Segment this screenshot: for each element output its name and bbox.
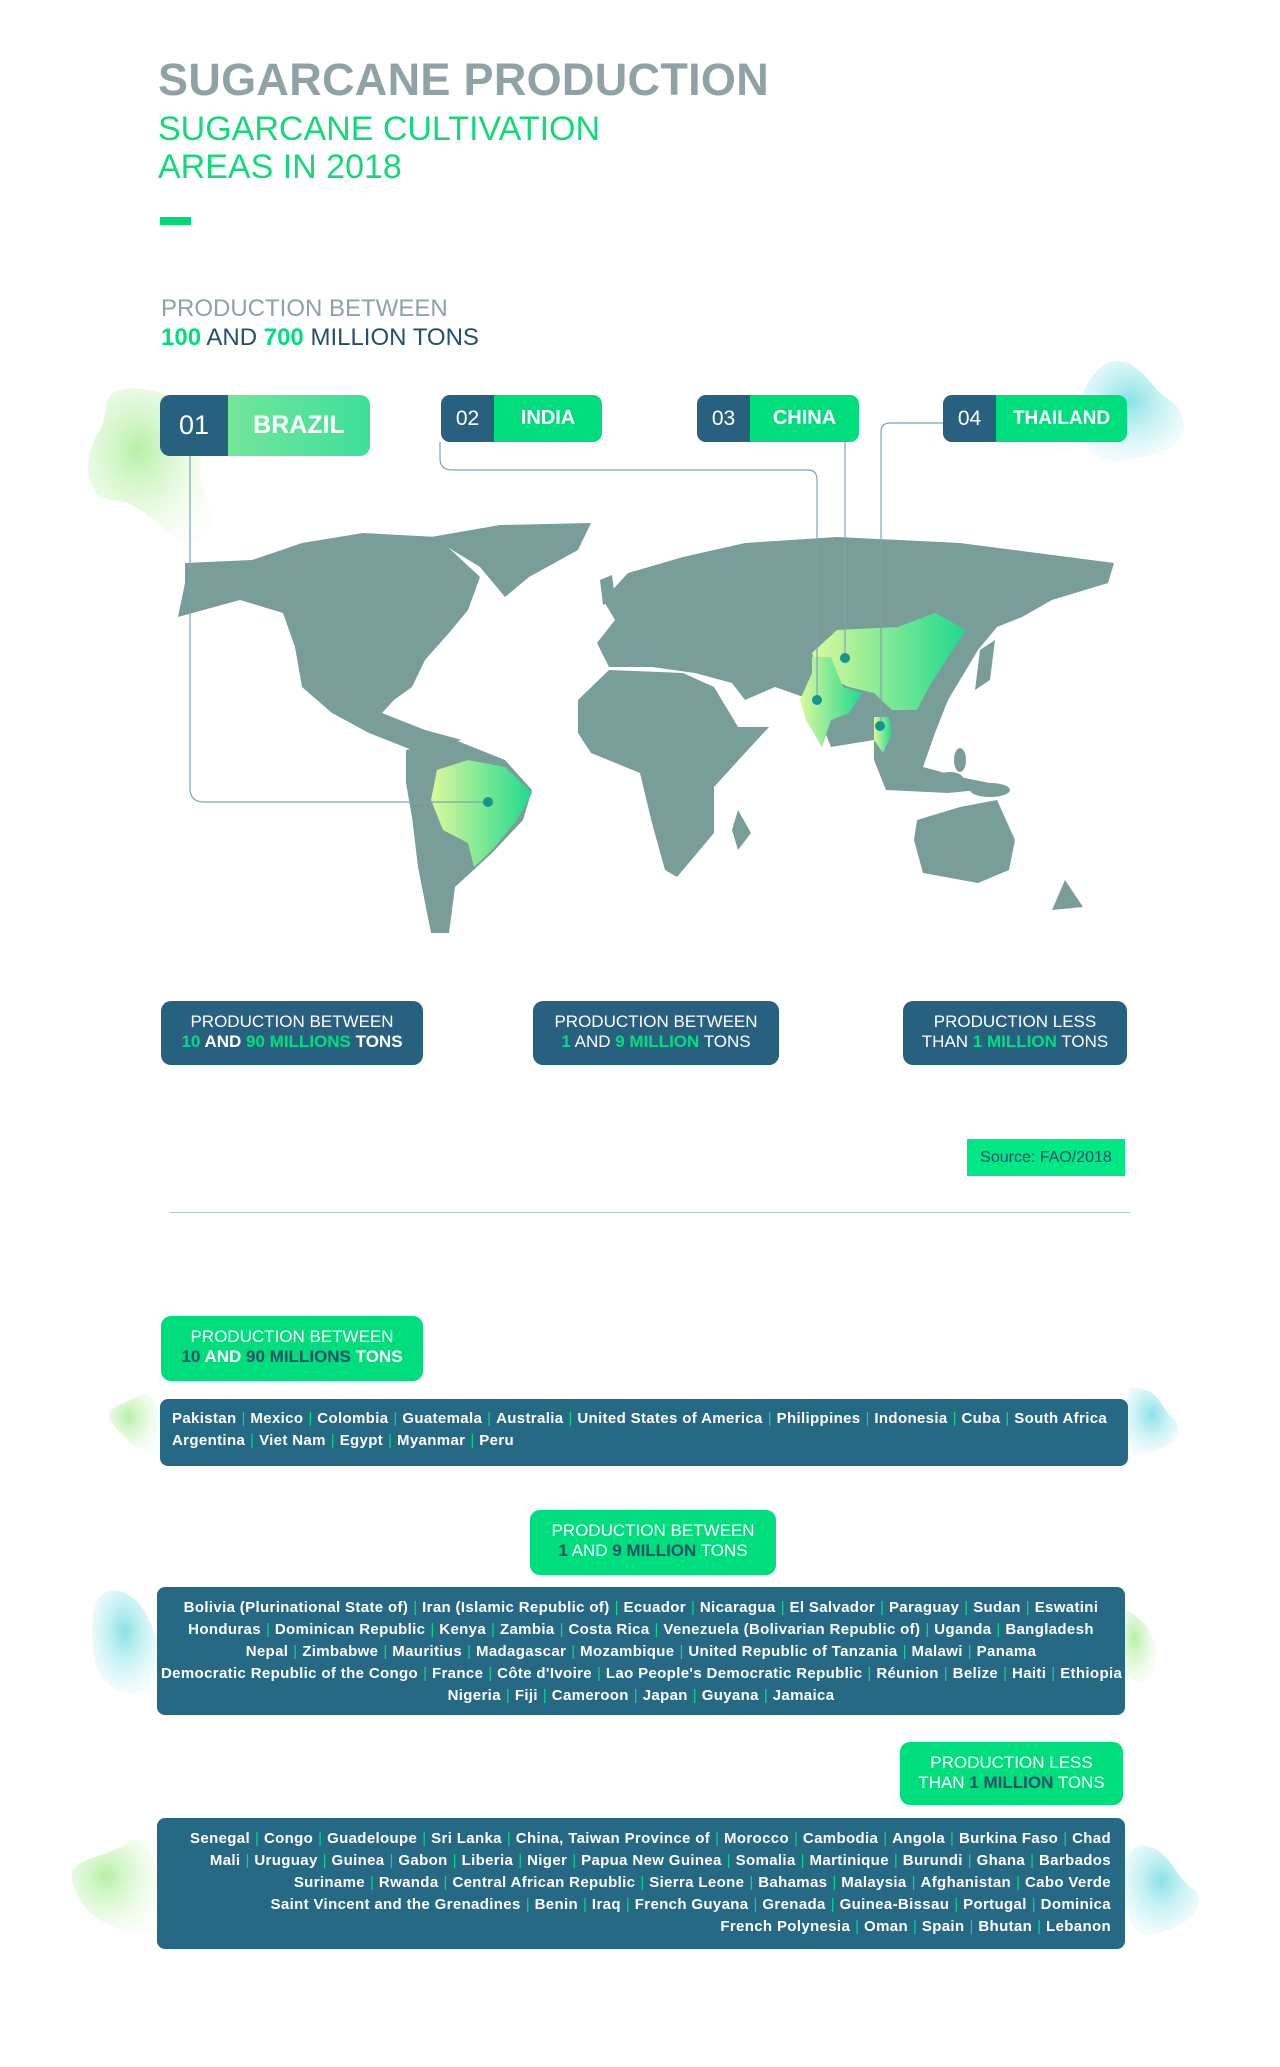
legend: 10-90 million bbox=[161, 1001, 423, 1065]
section label: 10-90 million: PRODUCTION BETWEEN bbox=[190, 1327, 394, 1346]
production heading: PRODUCTION BETWEEN bbox=[161, 295, 448, 322]
section label: less than 1 million bbox=[900, 1742, 1123, 1805]
legend: less than 1 million bbox=[903, 1001, 1127, 1065]
list panel: less than 1 million: Mali | Uruguay | Guinea | Gabon | Liberia | Niger | Papua New Guinea | Somalia | Martinique | Burundi | Ghana | Barbados bbox=[210, 1852, 1111, 1869]
section label: 1-9 million: PRODUCTION BETWEEN bbox=[551, 1521, 755, 1540]
label: 01 brazil: BRAZIL bbox=[253, 411, 345, 439]
greenland bbox=[431, 523, 591, 597]
section label: 10-90 million bbox=[161, 1316, 423, 1381]
list panel: 10-90 million: Argentina | Viet Nam | Egypt | Myanmar | Peru bbox=[172, 1432, 514, 1449]
title: SUGARCANE PRODUCTION bbox=[158, 54, 769, 105]
section label: 1-9 million: 1 AND 9 MILLION TONS bbox=[558, 1541, 748, 1560]
legend: 10-90 million: 10 AND 90 MILLIONS TONS bbox=[181, 1032, 403, 1051]
source: Source: FAO/2018 bbox=[980, 1149, 1112, 1166]
list panel: 1-9 million: Nigeria | Fiji | Cameroon | Japan | Guyana | Jamaica bbox=[448, 1687, 834, 1704]
label: 04 thailand: 04 bbox=[958, 407, 981, 430]
list panel: less than 1 million bbox=[157, 1818, 1125, 1949]
section label: 1-9 million bbox=[530, 1510, 776, 1575]
dots bbox=[483, 653, 885, 807]
list panel: less than 1 million: Senegal | Congo | Guadeloupe | Sri Lanka | China, Taiwan Province of | Morocco | Cambodia | Angola | Burkina Faso | Chad bbox=[190, 1830, 1111, 1847]
accent dash bbox=[160, 217, 191, 225]
label: 02 india bbox=[441, 395, 602, 442]
list panel: 1-9 million bbox=[157, 1587, 1125, 1715]
australia bbox=[914, 800, 1015, 883]
label: 01 brazil: 01 bbox=[179, 410, 209, 440]
south america bbox=[406, 740, 532, 933]
label: 01 brazil bbox=[160, 395, 370, 456]
subtitle bbox=[158, 110, 600, 186]
production heading bbox=[161, 295, 479, 351]
subtitle: AREAS IN 2018 bbox=[158, 148, 402, 186]
list panel: less than 1 million: Suriname | Rwanda | Central African Republic | Sierra Leone | Bahamas | Malaysia | Afghanistan | Cabo Verde bbox=[294, 1874, 1111, 1891]
legend: less than 1 million: THAN 1 MILLION TONS bbox=[922, 1032, 1108, 1051]
label: 04 thailand: THAILAND bbox=[1013, 408, 1110, 429]
label: 03 china: CHINA bbox=[773, 407, 836, 429]
production heading: 100 AND 700 MILLION TONS bbox=[161, 324, 479, 351]
eurasia bbox=[597, 537, 1114, 793]
label: 03 china: 03 bbox=[712, 407, 735, 430]
label: 02 india: INDIA bbox=[521, 407, 575, 429]
section label: less than 1 million: THAN 1 MILLION TONS bbox=[918, 1773, 1105, 1792]
north america bbox=[178, 533, 480, 750]
list panel: less than 1 million: French Polynesia | Oman | Spain | Bhutan | Lebanon bbox=[720, 1918, 1111, 1935]
uk & japan & islands bbox=[600, 575, 615, 605]
list panel: 1-9 million: Honduras | Dominican Republic | Kenya | Zambia | Costa Rica | Venezuela (Bolivarian Republic of) | Uganda | Bangladesh bbox=[188, 1621, 1094, 1638]
list panel: 1-9 million: Democratic Republic of the Congo | France | Côte d'Ivoire | Lao People's Democratic Republic | Réunion | Belize | Haiti | Ethiopia bbox=[161, 1665, 1122, 1682]
list panel: 10-90 million bbox=[160, 1399, 1128, 1466]
list panel: less than 1 million: Saint Vincent and the Grenadines | Benin | Iraq | French Guyana | Grenada | Guinea-Bissau | Portugal | Dominica bbox=[271, 1896, 1111, 1913]
legend: less than 1 million: PRODUCTION LESS bbox=[934, 1012, 1096, 1031]
list panel: 1-9 million: Nepal | Zimbabwe | Mauritius | Madagascar | Mozambique | United Republic of Tanzania | Malawi | Panama bbox=[246, 1643, 1036, 1660]
list panel: 1-9 million: Bolivia (Plurinational State of) | Iran (Islamic Republic of) | Ecuador | Nicaragua | El Salvador | Paraguay | Sudan | Eswatini bbox=[184, 1599, 1098, 1616]
subtitle: SUGARCANE CULTIVATION bbox=[158, 110, 600, 148]
legend: 1-9 million bbox=[533, 1001, 779, 1065]
highlighted countries bbox=[431, 613, 966, 867]
label: 02 india: 02 bbox=[456, 407, 479, 430]
world map with connectors bbox=[178, 422, 1114, 933]
connectors bbox=[190, 423, 943, 802]
legend: 1-9 million: 1 AND 9 MILLION TONS bbox=[561, 1032, 751, 1051]
africa bbox=[578, 670, 769, 877]
label: 03 china bbox=[697, 395, 859, 442]
source bbox=[967, 1139, 1125, 1176]
label: 04 thailand bbox=[943, 395, 1127, 442]
legend: 1-9 million: PRODUCTION BETWEEN bbox=[554, 1012, 758, 1031]
list panel: 10-90 million: Pakistan | Mexico | Colombia | Guatemala | Australia | United States of America | Philippines | Indonesia | Cuba | South Africa bbox=[172, 1410, 1107, 1427]
section label: less than 1 million: PRODUCTION LESS bbox=[930, 1753, 1093, 1772]
legend: 10-90 million: PRODUCTION BETWEEN bbox=[190, 1012, 394, 1031]
section label: 10-90 million: 10 AND 90 MILLIONS TONS bbox=[181, 1347, 403, 1366]
